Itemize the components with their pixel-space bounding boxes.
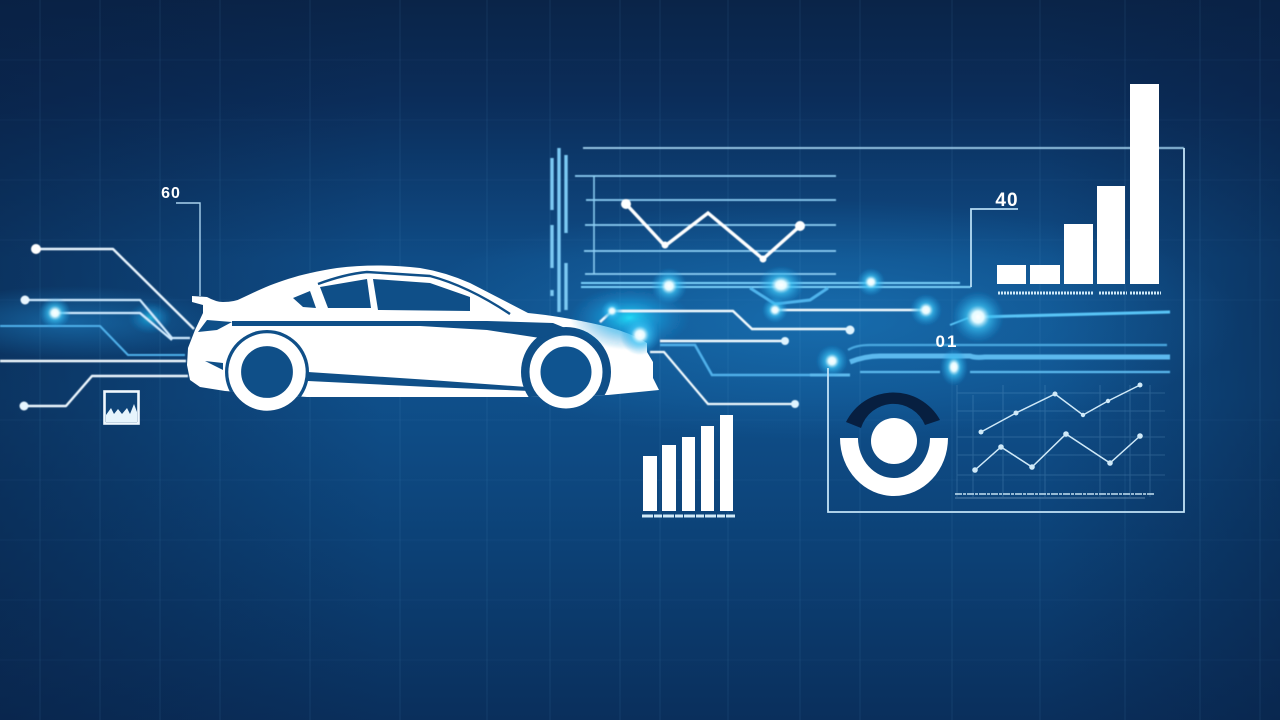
side window — [320, 279, 371, 308]
front window — [373, 279, 470, 311]
bar chart: lower centre — [642, 415, 735, 516]
bar chart: upper right — [997, 84, 1161, 293]
wheel arches — [225, 327, 611, 397]
rear wheel — [235, 340, 299, 404]
label: 40 with leader line — [971, 190, 1019, 287]
rear quarter window — [293, 291, 316, 308]
label: 01: 01 — [936, 332, 958, 351]
top line chart panel — [552, 148, 1184, 312]
dashboard frame — [828, 148, 1184, 512]
icon: small waveform box — [104, 392, 138, 424]
front wheel — [535, 341, 597, 403]
car silhouette — [187, 266, 659, 417]
roof trim — [318, 272, 510, 314]
dual line chart — [955, 382, 1165, 498]
label: 40 with leader line: 40 — [995, 190, 1019, 211]
label: 60 with leader line — [161, 185, 200, 296]
right circuit lines and glows — [570, 266, 1170, 408]
donut gauge — [840, 392, 948, 496]
waistline and trim cuts — [198, 320, 587, 391]
left circuit lines — [0, 244, 194, 410]
label: 60 with leader line: 60 — [161, 185, 181, 202]
